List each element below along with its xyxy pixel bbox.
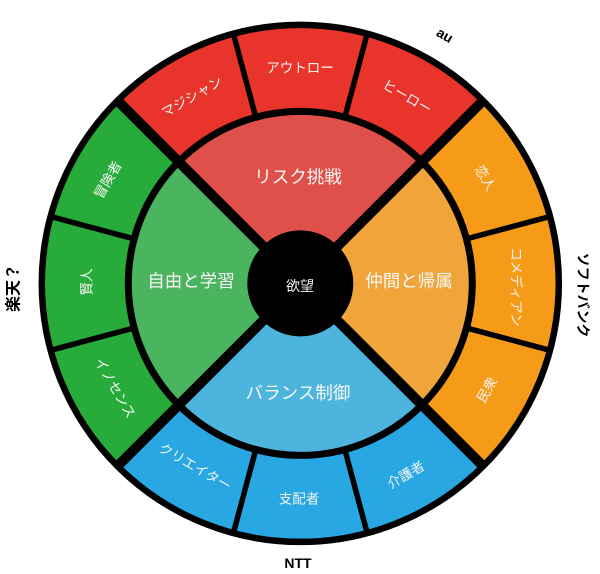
red archetype: アウトロー: アウトロー (266, 60, 334, 76)
green archetype: 冒険者: 冒険者 (91, 159, 125, 201)
inner ring: four quadrant sectors (128, 111, 472, 455)
quadrant label: 仲間と帰属: 仲間と帰属 (365, 271, 453, 291)
orange archetype: 民衆: 民衆 (473, 374, 500, 405)
blue archetype: クリエイター: クリエイター (156, 440, 234, 494)
center circle: 欲望: 欲望 (286, 278, 314, 294)
outer ring: coloured archetype sectors (42, 25, 558, 541)
green archetype: 賢人: 賢人 (80, 268, 94, 296)
brand label: ソフトバンク: ソフトバンク (575, 253, 591, 337)
brand label: NTT: NTT (284, 555, 312, 571)
blue archetype: 介護者: 介護者 (385, 458, 427, 492)
red archetype: ヒーロー: ヒーロー (380, 77, 434, 117)
brand label: au: au (434, 24, 456, 46)
black ring outlines and separators (42, 25, 559, 542)
quadrant label: リスク挑戦: リスク挑戦 (254, 167, 342, 187)
green archetype: イノセンス: イノセンス (92, 355, 138, 421)
orange archetype: 恋人: 恋人 (472, 163, 498, 194)
orange archetype: コメディアン: コメディアン (508, 247, 524, 327)
blue archetype: 支配者: 支配者 (279, 492, 319, 506)
quadrant label: バランス制御: バランス制御 (246, 383, 350, 403)
brand label: 楽天？: 楽天？ (4, 264, 22, 312)
quadrant label: 自由と学習: 自由と学習 (147, 271, 235, 291)
center circle: 欲望 (247, 230, 353, 336)
red archetype: マジシャン: マジシャン (159, 74, 225, 120)
